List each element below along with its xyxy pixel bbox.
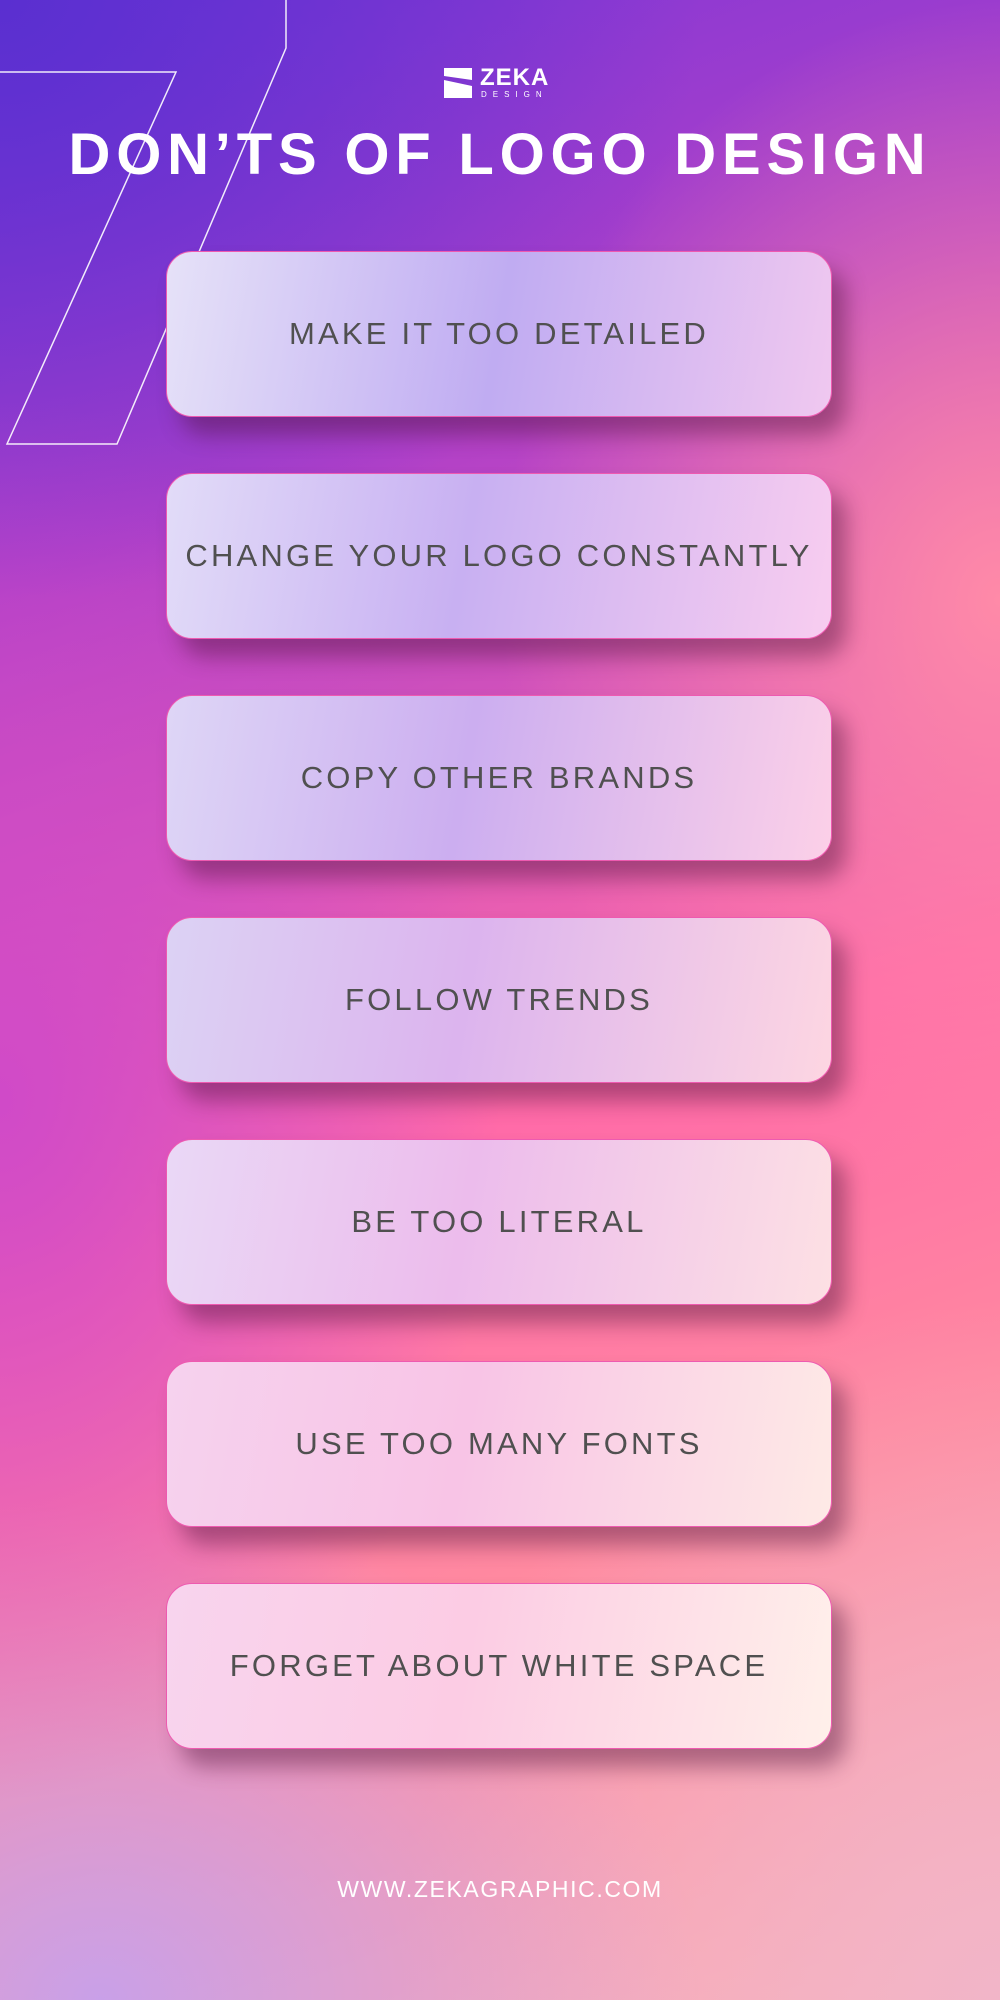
card 4: FOLLOW TRENDS [345, 982, 653, 1017]
logo: ZEKA [480, 64, 549, 91]
decorative outline shape [0, 0, 287, 445]
card 2 [166, 473, 832, 639]
card 7: FORGET ABOUT WHITE SPACE [230, 1648, 768, 1683]
card 2: CHANGE YOUR LOGO CONSTANTLY [185, 538, 813, 573]
card 7 [166, 1583, 832, 1749]
title: DON’TS OF LOGO DESIGN [69, 122, 931, 187]
card 1 [166, 251, 832, 417]
card 3 [166, 695, 832, 861]
icon: logo mark [444, 68, 472, 98]
card 6: USE TOO MANY FONTS [295, 1426, 703, 1461]
card 4 [166, 917, 832, 1083]
card 5 [166, 1139, 832, 1305]
card 6 [166, 1361, 832, 1527]
footer url: WWW.ZEKAGRAPHIC.COM [337, 1876, 663, 1902]
card 3: COPY OTHER BRANDS [301, 760, 697, 795]
card 5: BE TOO LITERAL [351, 1204, 647, 1239]
logo: DESIGN [481, 90, 548, 99]
card 1: MAKE IT TOO DETAILED [289, 316, 709, 351]
logo [444, 64, 549, 99]
